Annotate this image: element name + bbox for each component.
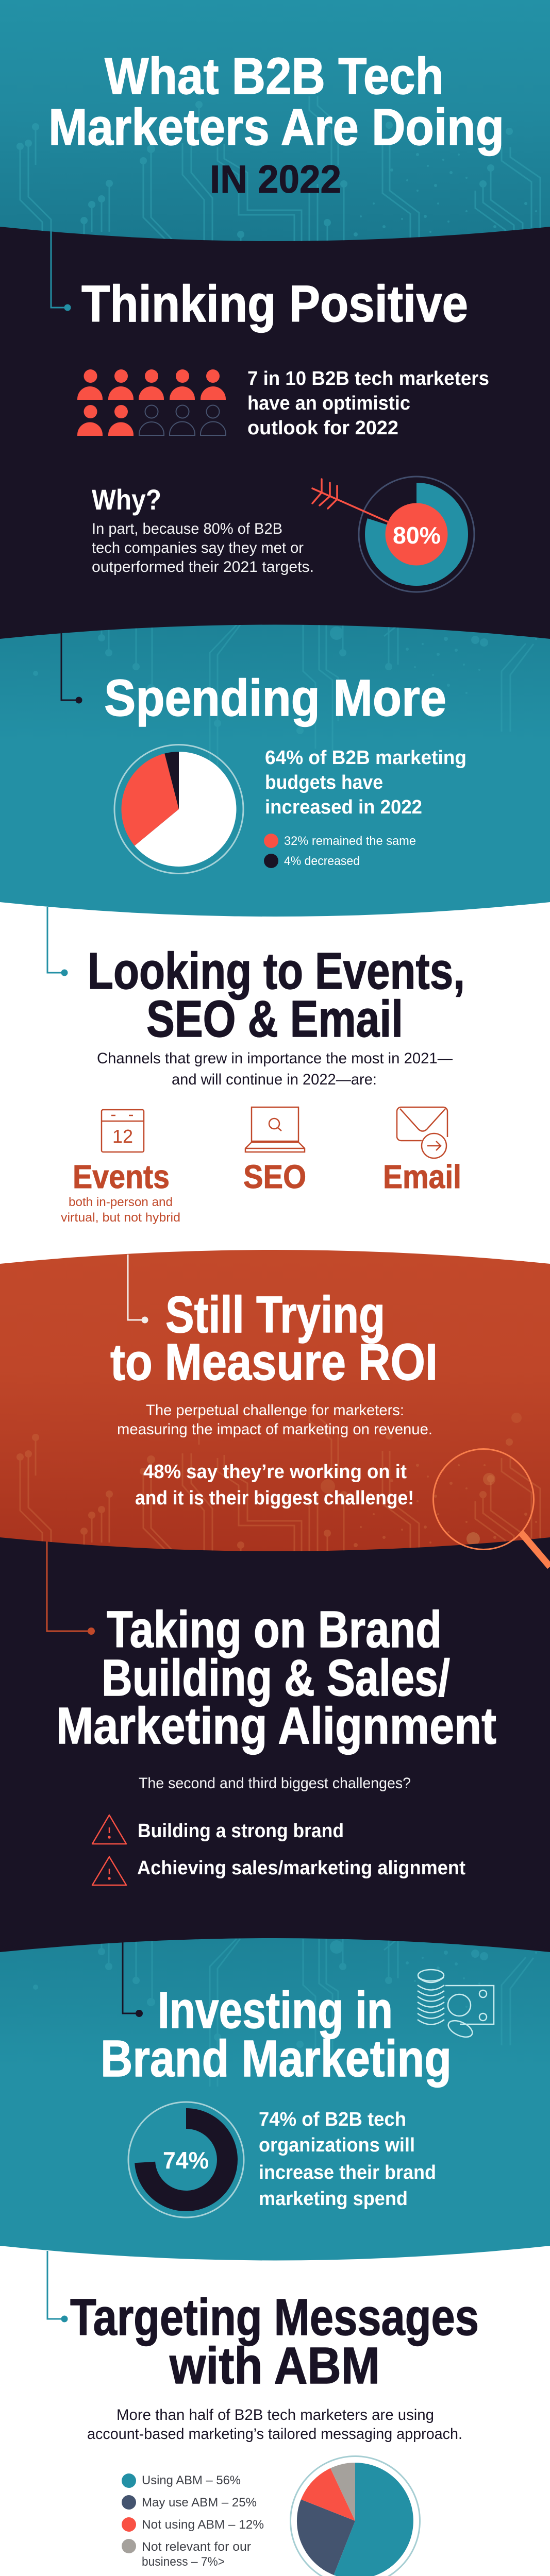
connector: thinking positive: [51, 227, 71, 311]
connector: events: [47, 907, 68, 976]
text: achieving alignment: Achieving sales/marketing alignment: [137, 1857, 465, 1879]
text: abm intro: More than half of B2B tech marketers are using: [116, 2406, 434, 2424]
legend: abm pie: Not relevant for our: [142, 2540, 251, 2554]
legend: abm pie: Not using ABM – 12%: [142, 2518, 264, 2532]
legend: budget pie: 32% remained the same: [284, 834, 416, 848]
heading: brand building: Building & Sales/: [102, 1649, 450, 1707]
label: email: Email: [383, 1158, 461, 1195]
heading: brand building: [56, 1601, 496, 1755]
icon: warning 2: [92, 1857, 126, 1885]
heading: spending more: Spending More: [104, 669, 446, 727]
icon: magnifying glass: [433, 1449, 550, 1567]
connector: investing: [123, 1942, 143, 2017]
text: 74% statistic: marketing spend: [259, 2188, 408, 2210]
panel: title header: [0, 0, 550, 247]
panel: looking to events, seo and email: [47, 907, 465, 1225]
text: channels intro: Channels that grew in importance the most in 2021—: [97, 1050, 453, 1067]
text: why explanation: [92, 520, 314, 575]
panel: targeting messages with abm: [47, 2251, 479, 2576]
subheading: why: Why?: [92, 483, 161, 516]
heading: events seo email: [88, 942, 465, 1048]
chart: 74% donut: 74%: [163, 2147, 209, 2174]
text: challenges intro: The second and third biggest challenges?: [139, 1775, 411, 1792]
panel: taking on brand building: [0, 1520, 550, 1968]
icon: email arrow: [397, 1107, 447, 1158]
text: abm intro: account-based marketing’s tailored messaging approach.: [87, 2426, 462, 2443]
heading: abm: [70, 2289, 479, 2395]
chart: budget pie: [114, 745, 243, 874]
heading: measure roi: to Measure ROI: [110, 1333, 438, 1391]
heading: investing: Investing in: [158, 1981, 393, 2039]
text: 74% statistic: 74% of B2B tech: [259, 2109, 406, 2130]
text: channels intro: [97, 1050, 453, 1088]
heading: thinking positive: Thinking Positive: [81, 275, 468, 333]
legend: abm pie: May use ABM – 25%: [142, 2496, 257, 2510]
chart: 80% target donut: 80%: [393, 522, 441, 549]
title: Marketers Are Doing: [48, 98, 504, 156]
text: events note: virtual, but not hybrid: [61, 1211, 180, 1225]
legend: budget pie: [264, 834, 416, 868]
title: [48, 47, 504, 156]
panel: investing in brand marketing: [0, 1938, 550, 2261]
heading: measure roi: Still Trying: [165, 1286, 385, 1344]
text: 74% statistic: increase their brand: [259, 2162, 436, 2183]
text: events note: both in-person and: [69, 1195, 173, 1209]
panel: thinking positive: [0, 216, 550, 649]
text: 64% statistic: 64% of B2B marketing: [265, 747, 466, 769]
text: events note: [61, 1195, 180, 1225]
heading: brand building: Marketing Alignment: [56, 1697, 496, 1755]
icon: people 7 in 10: [77, 369, 226, 436]
panel: spending more: [0, 624, 550, 917]
icon: arrow: [312, 479, 389, 522]
chart: 74% donut: [128, 2102, 244, 2217]
icon: laptop search: [245, 1107, 305, 1152]
heading: events seo email: Looking to Events,: [88, 942, 465, 1000]
legend: abm pie: business – 7%>: [142, 2555, 225, 2569]
text: 74% statistic: [259, 2109, 436, 2210]
text: why explanation: outperformed their 2021 targets.: [92, 558, 314, 575]
heading: investing: [101, 1981, 452, 2088]
chart: abm pie: [291, 2456, 420, 2576]
heading: abm: Targeting Messages: [70, 2289, 479, 2346]
text: why explanation: In part, because 80% of B2B: [92, 520, 282, 537]
legend: budget pie: 4% decreased: [284, 854, 360, 868]
connector: measure roi: [128, 1255, 148, 1323]
icon: calendar: 12: [112, 1126, 133, 1147]
heading: investing: Brand Marketing: [101, 2030, 452, 2088]
text: 48% statistic: [135, 1461, 414, 1509]
chart: 80% target donut: [312, 477, 474, 592]
legend: abm pie: [122, 2473, 264, 2569]
icon: calendar: [102, 1110, 144, 1152]
text: 74% statistic: organizations will: [259, 2134, 415, 2156]
heading: brand building: Taking on Brand: [107, 1601, 442, 1658]
connector: brand building: [47, 1538, 95, 1635]
text: 64% statistic: budgets have: [265, 772, 383, 793]
text: 7 in 10 statistic: 7 in 10 B2B tech marketers: [247, 368, 489, 389]
text: why explanation: tech companies say they met or: [92, 539, 304, 556]
text: 64% statistic: increased in 2022: [265, 796, 422, 818]
text: abm intro: [87, 2406, 462, 2443]
text: perpetual challenge: The perpetual challenge for marketers:: [146, 1402, 404, 1419]
connector: spending more: [61, 633, 82, 704]
text: 48% statistic: 48% say they’re working on it: [143, 1461, 407, 1483]
text: 48% statistic: and it is their biggest challenge!: [135, 1487, 414, 1509]
text: 64% statistic: [265, 747, 466, 818]
text: 7 in 10 statistic: outlook for 2022: [247, 417, 398, 439]
heading: abm: with ABM: [169, 2337, 380, 2395]
connector: abm: [47, 2251, 68, 2323]
subtitle: in 2022: IN 2022: [210, 158, 341, 201]
icon: warning 1: [92, 1815, 126, 1844]
heading: measure roi: [110, 1286, 438, 1391]
text: perpetual challenge: [117, 1402, 432, 1438]
text: building a strong brand: Building a strong brand: [138, 1820, 344, 1842]
text: 7 in 10 statistic: [247, 368, 489, 439]
panel: still trying to measure roi: [0, 1250, 550, 1567]
label: seo: SEO: [243, 1158, 306, 1195]
text: perpetual challenge: measuring the impact of marketing on revenue.: [117, 1421, 432, 1438]
icon: coins and cash: [418, 1970, 494, 2040]
text: channels intro: and will continue in 2022—are:: [172, 1071, 377, 1088]
label: events: Events: [73, 1158, 170, 1195]
title: What B2B Tech: [105, 47, 444, 105]
legend: abm pie: Using ABM – 56%: [142, 2473, 241, 2487]
heading: events seo email: SEO & Email: [146, 990, 403, 1048]
text: 7 in 10 statistic: have an optimistic: [247, 393, 410, 414]
